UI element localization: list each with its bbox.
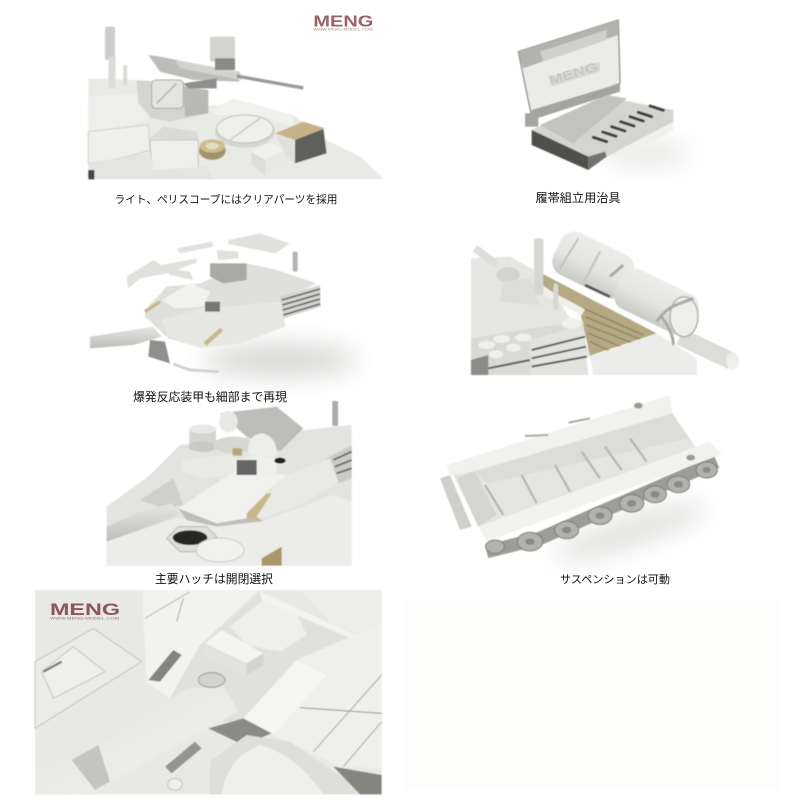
caption: track jig: 履帯組立用治具	[536, 191, 620, 205]
panel: lower hull suspension render	[440, 395, 722, 569]
logo: MENG: MENG	[313, 14, 373, 31]
panel: exploded turret render	[90, 233, 357, 375]
turret body	[145, 263, 317, 347]
panel: track assembly jig render	[518, 20, 690, 170]
commander cupola	[189, 424, 217, 452]
upper left armor	[143, 590, 258, 698]
logo: MENG	[50, 600, 120, 621]
panel: rear turret stowage render	[471, 226, 739, 375]
logo: MENG: MENG	[50, 600, 120, 619]
window with clear part	[275, 122, 327, 163]
ammunition block	[150, 127, 198, 175]
right armor	[243, 623, 382, 768]
gun barrel	[90, 327, 162, 348]
caption: reactive armor: 爆発反応装甲も細部まで再現	[133, 390, 287, 404]
driver hatch	[210, 735, 382, 794]
floating armor plates	[127, 233, 290, 288]
periscope window	[232, 448, 277, 475]
transparent lid	[518, 20, 620, 120]
caption: clear parts: ライト、ペリスコープにはクリアパーツを採用	[114, 193, 338, 206]
panel: gun mantlet close-up render	[35, 590, 382, 794]
weapon station	[219, 407, 303, 457]
mantlet and gun	[107, 478, 183, 542]
logo on lid: MENG	[547, 60, 600, 88]
jig tray	[532, 95, 673, 170]
track and wheels	[486, 462, 717, 553]
remote weapon station	[137, 37, 303, 122]
grenade cage	[327, 445, 352, 483]
logo: MENG: WWW.MENG-MODEL.COM	[313, 28, 373, 32]
hull tub	[440, 395, 722, 542]
icon: brass ring	[199, 139, 226, 160]
icon: periscope mast	[105, 27, 116, 88]
grenade cage	[280, 285, 321, 318]
sight box	[205, 630, 263, 675]
panel: turret overview render	[107, 401, 352, 566]
icon: mast	[534, 238, 558, 310]
lower plates	[148, 340, 170, 363]
caption: hatches: 主要ハッチは開閉選択	[155, 572, 273, 586]
logo: MENG: WWW.MENG-MODEL.COM	[50, 617, 119, 621]
gun barrel	[35, 673, 272, 794]
round hatch	[215, 116, 275, 148]
fuel drum 1	[547, 226, 640, 304]
panel: periscope and remote weapon station render	[88, 14, 382, 179]
smoke grenade cage	[471, 318, 588, 375]
rod	[680, 337, 739, 370]
fuel drum 2	[610, 264, 704, 345]
photo-etched tan grille	[542, 273, 657, 356]
engine deck hatch	[35, 628, 142, 728]
small box	[252, 142, 283, 175]
caption: suspension: サスペンションは可動	[560, 572, 670, 586]
mantlet recess and fabric cover	[170, 590, 382, 725]
turret front armor	[178, 458, 338, 527]
open hatch	[167, 527, 244, 562]
